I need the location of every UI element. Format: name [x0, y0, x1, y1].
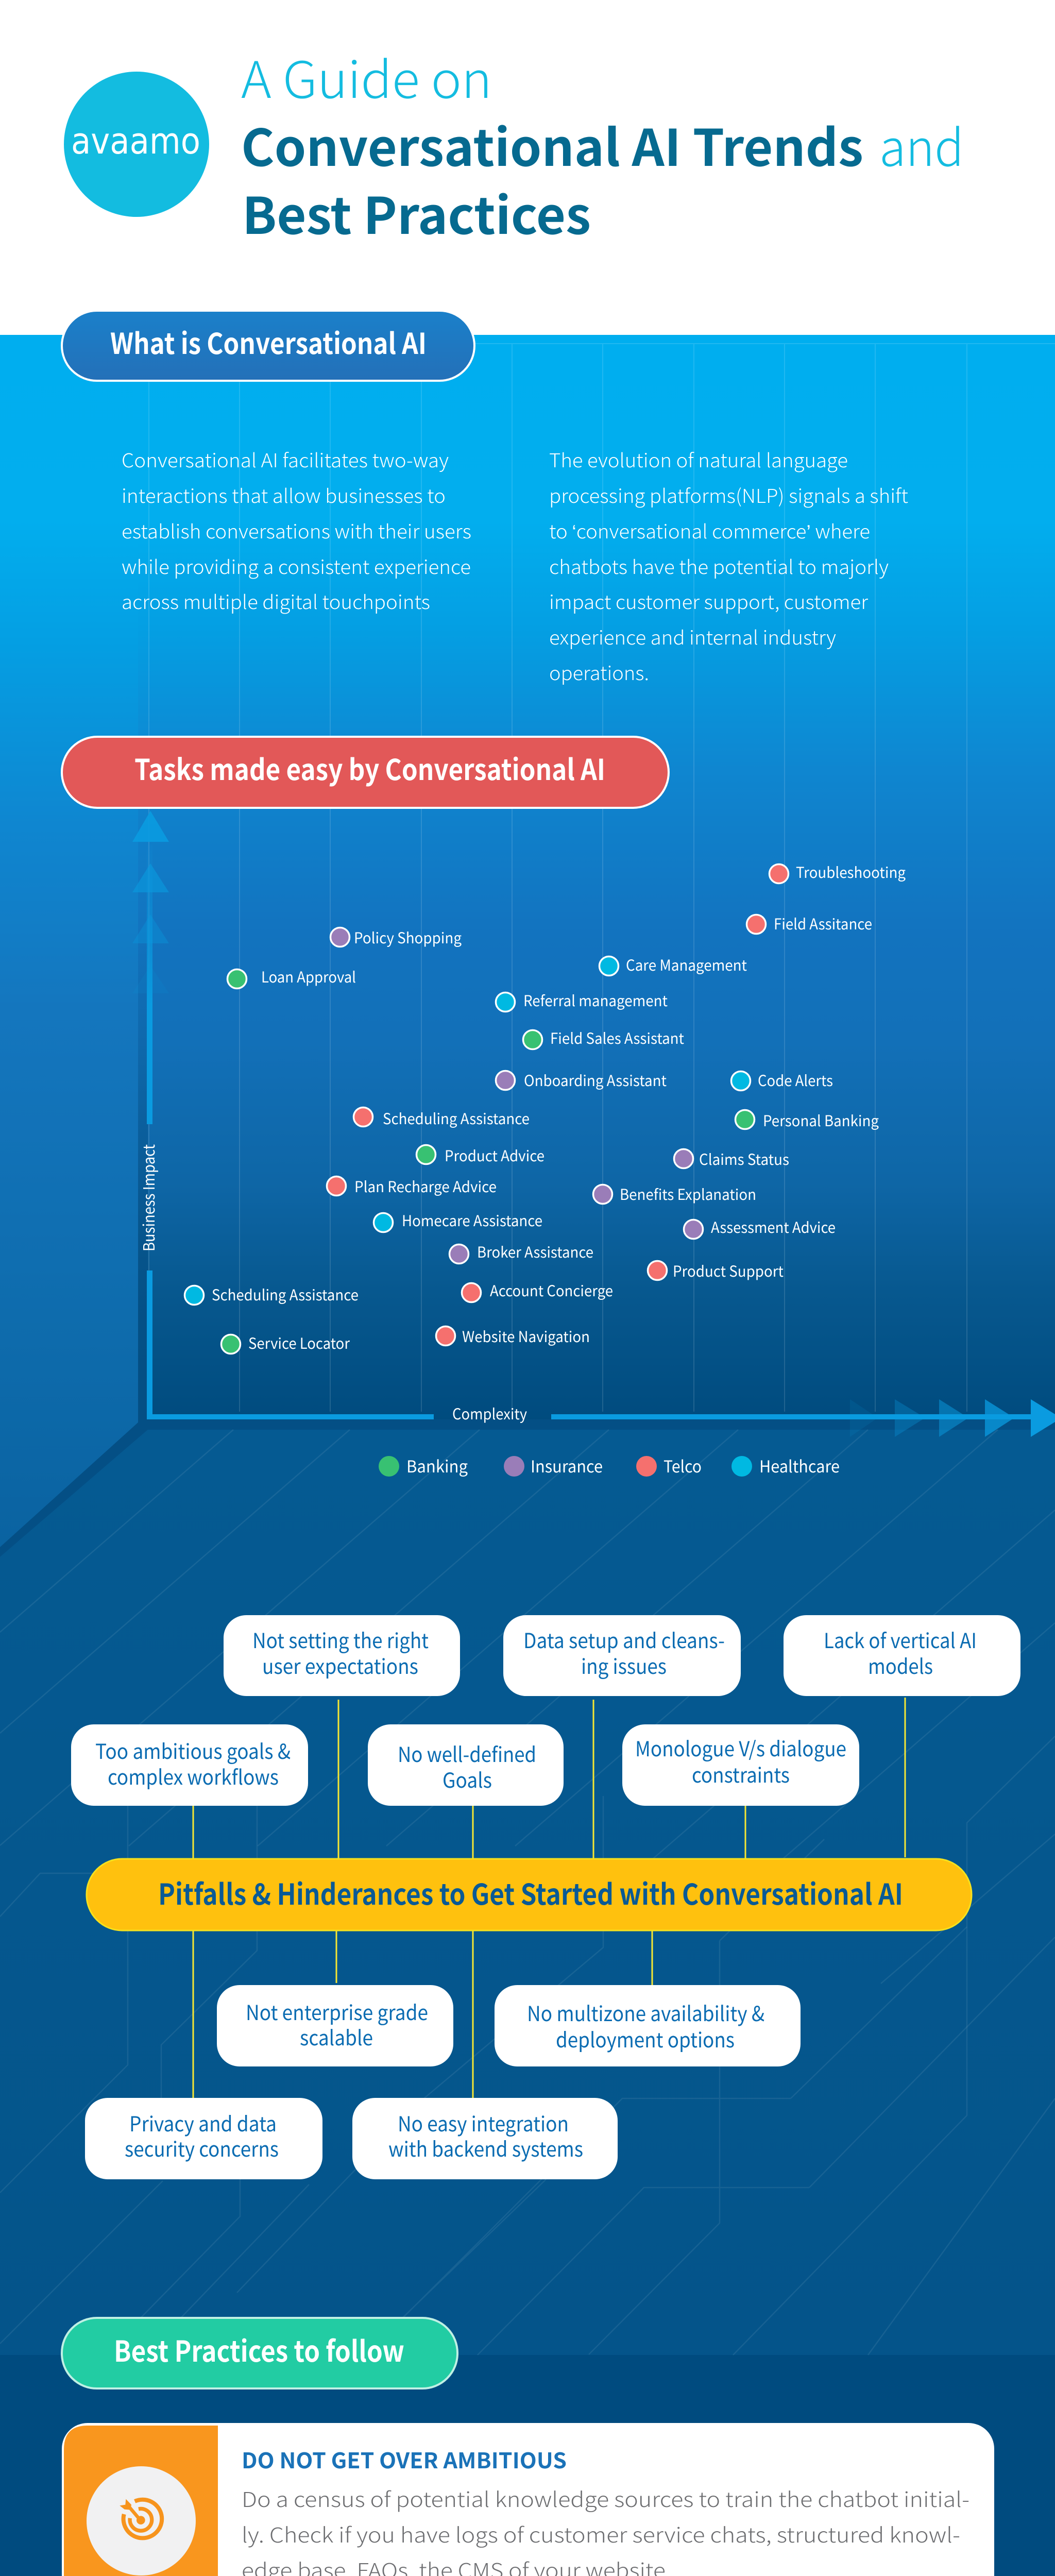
x axis arrow: [147, 1399, 1055, 1437]
text block: left intro: while providing a consistent experience: [122, 552, 471, 580]
scatter chart points: Personal Banking: [763, 1109, 879, 1131]
scatter chart points: Onboarding Assistant: [524, 1069, 667, 1091]
card: Do not get over ambitious: Do a census of potential knowledge sources to train the chatbot initial-: [242, 2483, 969, 2513]
scatter chart points: Loan Approval: [261, 965, 356, 987]
pitfall: Data setup and cleansing issues: Data setup and cleans-: [523, 1624, 725, 1654]
text block: left intro: establish conversations with their users: [122, 516, 471, 544]
text block: right intro: The evolution of natural language: [549, 445, 848, 473]
heading: What is Conversational AI: [62, 311, 474, 381]
pitfall: Not setting the right user expectations: [224, 1615, 460, 1696]
pitfall: No well-defined Goals: Goals: [443, 1764, 492, 1794]
heading: Pitfalls and Hinderances: Pitfalls & Hinderances to Get Started with Conversational AI: [158, 1872, 903, 1913]
legend: [379, 1454, 840, 1478]
pitfall: Privacy and data security: Privacy and data: [129, 2108, 277, 2138]
text block: right intro: chatbots have the potential to majorly: [549, 552, 889, 580]
text block: left intro: Conversational AI facilitates two-way: [122, 445, 449, 473]
scatter chart points: Policy Shopping: [354, 926, 462, 948]
scatter chart points: Account Concierge: [490, 1279, 613, 1301]
pitfall: Data setup and cleansing issues: [503, 1615, 741, 1696]
logo: avaamo: [71, 120, 200, 162]
title: and: [879, 108, 964, 181]
pitfall: Not enterprise grade: scalable: [300, 2022, 373, 2052]
heading: Best Practices: Best Practices to follow: [114, 2329, 404, 2370]
scatter chart points: Website Navigation: [462, 1325, 590, 1347]
text block: right intro: to ‘conversational commerce ’ where: [549, 516, 870, 544]
pitfall: Data setup and cleansing issues: ing issues: [581, 1650, 667, 1680]
scatter chart points: Code Alerts: [758, 1069, 833, 1091]
pitfall: No well-defined Goals: [368, 1724, 564, 1806]
pitfall: Monologue vs dialogue: Monologue V/s dialogue: [635, 1733, 846, 1762]
scatter chart points: Assessment Advice: [711, 1216, 836, 1238]
scatter chart points: Scheduling Assistance: [383, 1107, 530, 1129]
text block: left intro: interactions that allow businesses to: [122, 481, 446, 509]
text block: left intro: [122, 445, 471, 615]
scatter chart points: Service Locator: [248, 1332, 350, 1353]
heading: What is Conversational AI: What is Conversational AI: [110, 321, 427, 363]
heading: Tasks made easy: Tasks made easy by Conversational AI: [134, 747, 605, 789]
pitfall: Lack of vertical AI models: Lack of vertical AI: [824, 1624, 977, 1654]
pitfall: Not enterprise grade: [217, 1985, 453, 2066]
pitfall: Not setting the right user expectations: Not setting the right: [252, 1624, 429, 1654]
pitfall: No easy integration: with backend systems: [388, 2133, 583, 2163]
pitfall: Monologue vs dialogue: constraints: [692, 1759, 790, 1789]
legend: Telco: [663, 1454, 702, 1478]
card: Do not get over ambitious: DO NOT GET OVER AMBITIOUS: [242, 2444, 567, 2475]
scatter chart points: Broker Assistance: [477, 1241, 593, 1262]
connector lines: [193, 1698, 905, 2098]
scatter chart points: Product Support: [673, 1260, 784, 1281]
text block: right intro: [549, 445, 908, 686]
scatter chart points: Care Management: [626, 954, 747, 975]
heading: Best Practices: [62, 2318, 457, 2388]
title: A Guide on: [241, 40, 492, 113]
pitfall: Privacy and data security: [85, 2098, 322, 2179]
scatter chart points: Referral management: [523, 989, 668, 1011]
logo: [64, 72, 209, 217]
text block: right intro: processing platforms(NLP) signals a shift: [549, 481, 908, 509]
header background: [0, 0, 1055, 335]
pitfall: Privacy and data security: security concerns: [125, 2133, 279, 2163]
y axis arrow: [132, 811, 169, 1419]
pitfall: Lack of vertical AI models: [784, 1615, 1020, 1696]
heading: Tasks made easy: [62, 737, 669, 808]
text block: left intro: across multiple digital touchpoints: [122, 587, 430, 615]
heading: Pitfalls and Hinderances: [87, 1859, 972, 1930]
x axis label: Complexity: [452, 1402, 527, 1424]
pitfall: Too ambitious goals: Too ambitious goals &: [95, 1735, 291, 1765]
text block: right intro: operations.: [549, 658, 649, 686]
pitfall: Too ambitious goals: complex workflows: [108, 1761, 279, 1791]
scatter chart points: Field Assitance: [774, 912, 872, 934]
card: Do not get over ambitious: ly. Check if you have logs of customer service chats, structured knowl-: [242, 2519, 960, 2549]
text block: right intro: impact customer support, customer: [549, 587, 869, 615]
pitfall: Not enterprise grade: Not enterprise grade: [246, 1996, 428, 2026]
scatter chart points: Scheduling Assistance: [212, 1283, 359, 1305]
legend: Banking: [406, 1454, 468, 1478]
pitfall: No multizone availability: deployment options: [556, 2024, 735, 2054]
icon: target: [120, 2499, 162, 2538]
scatter chart points: [184, 861, 906, 1354]
pitfall: No well-defined Goals: No well-defined: [398, 1738, 536, 1768]
pitfall: Lack of vertical AI models: models: [868, 1650, 933, 1680]
scatter chart points: Benefits Explanation: [620, 1183, 756, 1205]
pitfall: No multizone availability: No multizone availability &: [527, 1997, 764, 2027]
y axis label: Business Impact: [137, 1144, 159, 1251]
pitfall: No multizone availability: [495, 1985, 801, 2066]
scatter chart points: Claims Status: [699, 1148, 789, 1170]
title: Conversational AI Trends: [241, 108, 863, 181]
scatter chart points: Homecare Assistance: [402, 1209, 542, 1231]
pitfall: No easy integration: [352, 2098, 618, 2179]
title: Best Practices: [242, 176, 591, 249]
pitfall: Too ambitious goals: [71, 1724, 308, 1806]
scatter chart points: Plan Recharge Advice: [354, 1175, 497, 1197]
pitfall: No easy integration: No easy integration: [398, 2108, 569, 2138]
title: [241, 40, 964, 249]
legend: Healthcare: [759, 1454, 840, 1478]
text block: right intro: experience and internal industry: [549, 622, 836, 650]
scatter chart points: Troubleshooting: [796, 861, 906, 883]
legend: Insurance: [531, 1454, 603, 1478]
card: Do not get over ambitious: [62, 2423, 994, 2576]
pitfall: Monologue vs dialogue: [622, 1724, 859, 1806]
scatter chart points: Field Sales Assistant: [550, 1027, 684, 1048]
pitfall: Not setting the right user expectations: user expectations: [262, 1650, 418, 1680]
scatter chart points: Product Advice: [445, 1144, 544, 1166]
